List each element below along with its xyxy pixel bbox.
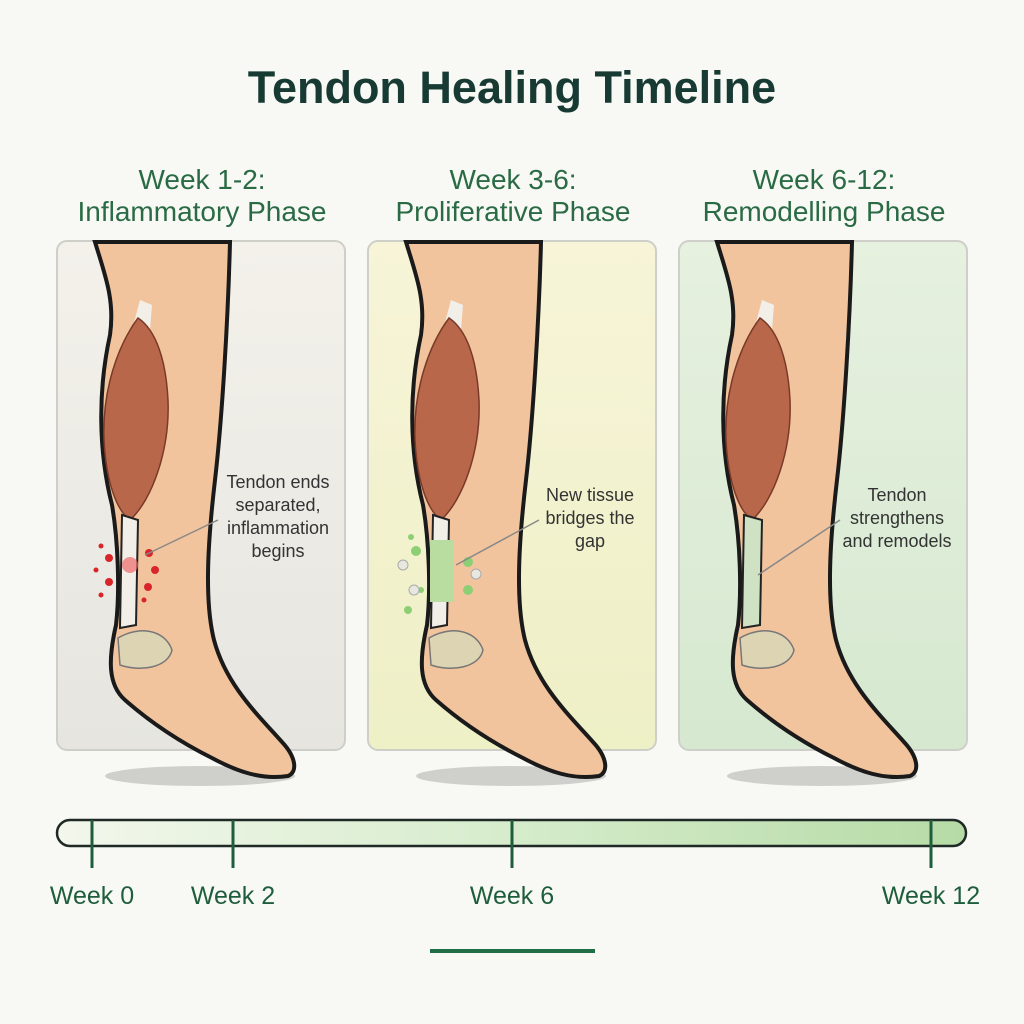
heading: phase 2: Week 3-6:	[449, 164, 577, 195]
heading: phase 1: Inflammatory Phase	[78, 196, 326, 227]
leg 3	[717, 242, 917, 786]
heading: phase 3: Week 6-12:	[753, 164, 895, 195]
heading: phase 3: Remodelling Phase	[703, 196, 945, 227]
heading: phase 1	[78, 164, 326, 227]
timeline: Week 12	[882, 882, 980, 910]
panel 3	[679, 241, 967, 786]
heading: phase 3	[703, 164, 945, 227]
label 3: strengthens	[850, 508, 944, 528]
timeline: Week 0	[50, 882, 134, 910]
timeline: Week 6	[470, 882, 554, 910]
label 2: bridges the	[545, 508, 635, 528]
heading: phase 2	[395, 164, 630, 227]
label 1: inflammation	[227, 518, 329, 538]
heading: phase 1: Week 1-2:	[138, 164, 266, 195]
label 3: Tendon	[867, 485, 927, 505]
timeline	[50, 820, 980, 910]
bottom accent line	[430, 949, 595, 953]
label 1: separated,	[235, 495, 321, 515]
title: Tendon Healing Timeline	[248, 62, 776, 113]
label 2: gap	[575, 531, 605, 551]
heading: phase 2: Proliferative Phase	[395, 196, 630, 227]
timeline: Week 2	[191, 882, 275, 910]
label 3: and remodels	[842, 531, 952, 551]
label 1: Tendon ends	[226, 472, 330, 492]
panel 2	[368, 241, 656, 786]
panel 1	[57, 241, 345, 786]
label 1: begins	[251, 541, 305, 561]
leg 1	[94, 242, 295, 786]
leg 2	[398, 242, 606, 786]
tear marks	[94, 544, 159, 602]
label 2: New tissue	[546, 485, 634, 505]
